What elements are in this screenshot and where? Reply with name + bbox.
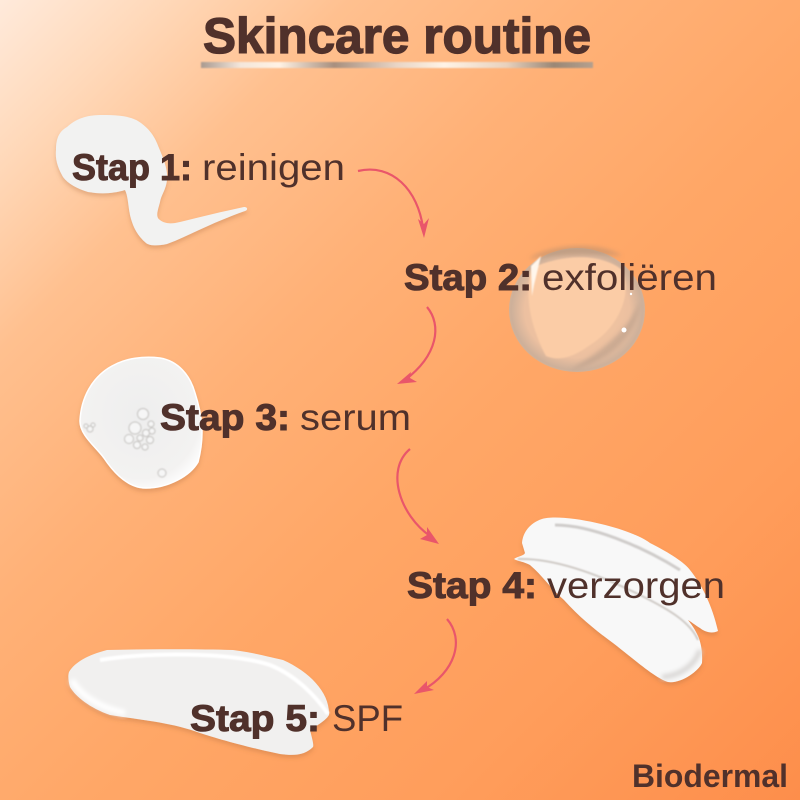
step 3 label: serum [300, 397, 411, 438]
icon: serum drop [80, 357, 202, 488]
icon: cleanser swirl [56, 115, 247, 245]
logo: Biodermal: Biodermal [632, 758, 788, 794]
title: Skincare routine [203, 8, 591, 64]
step 5 label: SPF [332, 698, 403, 739]
step 5 label [190, 698, 403, 739]
icon: SPF smear [68, 649, 329, 755]
step 5 label: Stap 5: [190, 698, 320, 739]
step 2 label: exfoliëren [542, 257, 717, 298]
step 2 label [404, 257, 717, 298]
arrow: step 1 to step 2 [358, 170, 429, 238]
step 3 label: Stap 3: [160, 397, 290, 438]
title underline [201, 62, 593, 68]
step 4 label: verzorgen [547, 565, 725, 606]
step 4 label [407, 565, 725, 606]
step 4 label: Stap 4: [407, 565, 537, 606]
icon: exfoliant droplet [509, 246, 645, 372]
arrow: step 3 to step 4 [397, 449, 439, 544]
arrow: step 4 to step 5 [414, 619, 456, 694]
step 1 label: reinigen [202, 147, 345, 188]
icon: moisturizer smear [514, 518, 718, 682]
step 2 label: Stap 2: [404, 257, 532, 298]
step 3 label [160, 397, 411, 438]
step 1 label: Stap 1: [72, 147, 192, 188]
arrow: step 2 to step 3 [397, 307, 435, 384]
step 1 label [72, 147, 345, 188]
serum bubbles [84, 408, 166, 477]
